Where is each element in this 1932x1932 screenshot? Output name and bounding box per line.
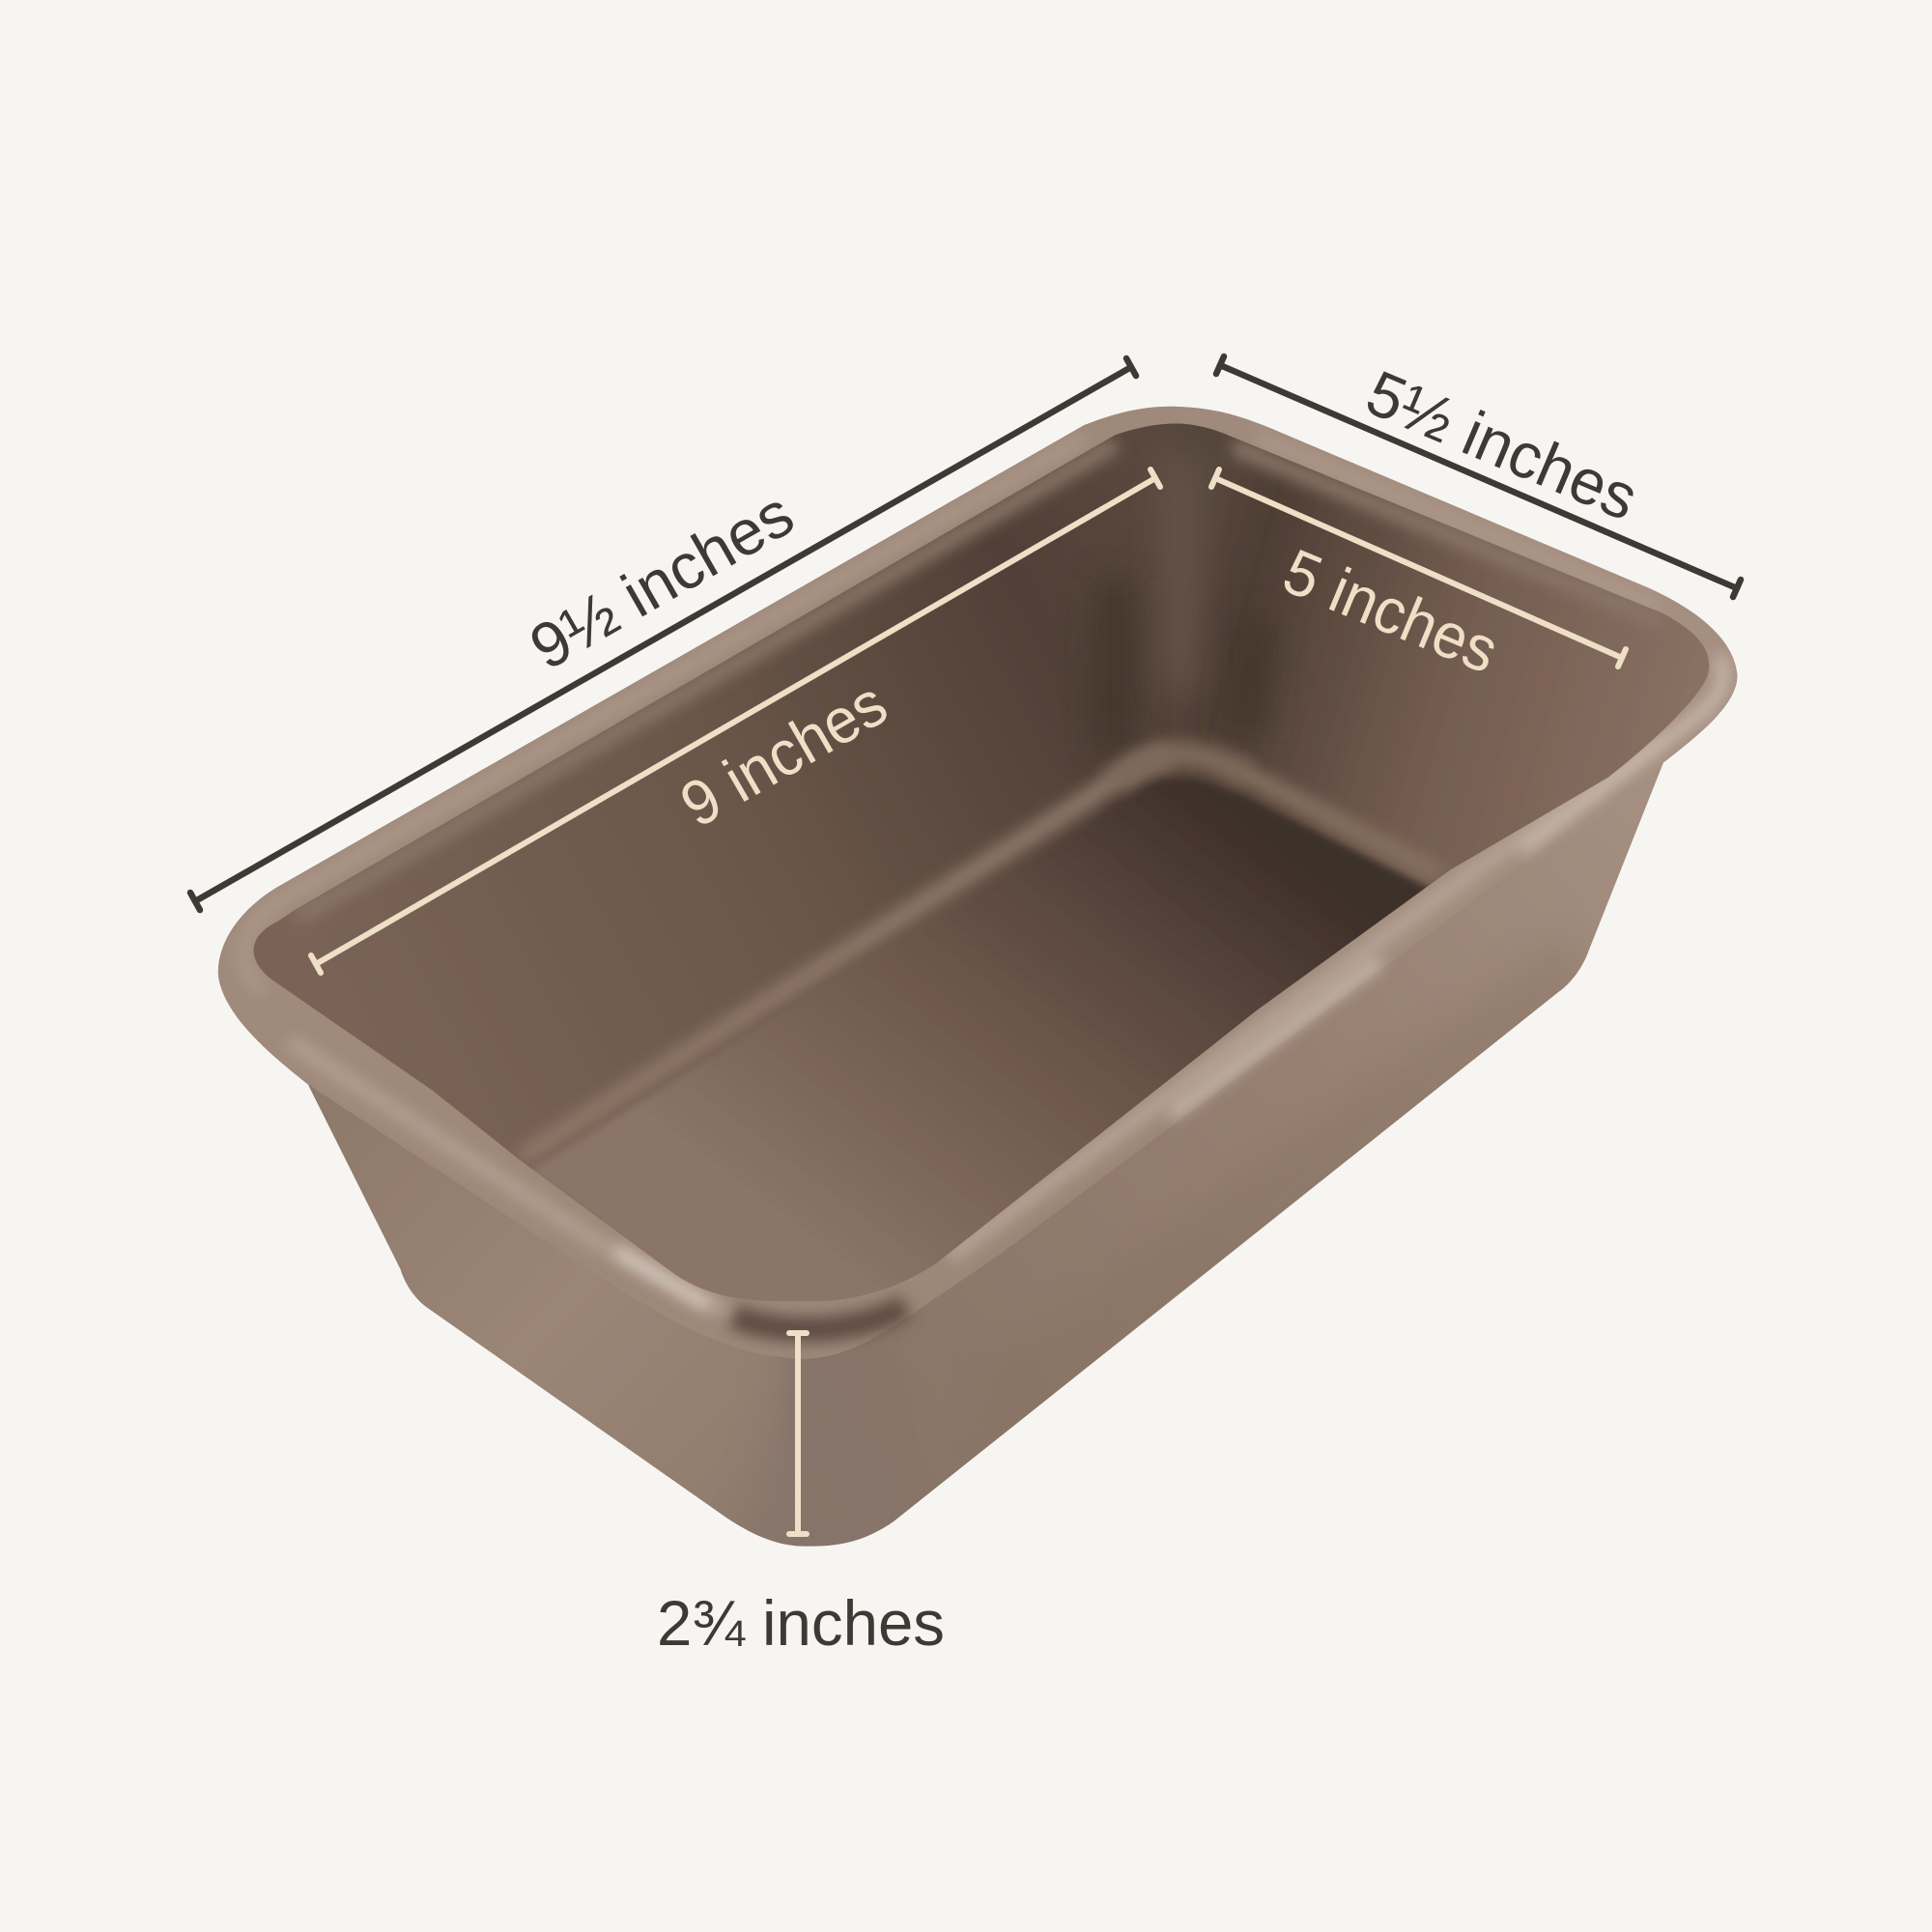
label: 5½ inches (1357, 356, 1648, 534)
label: 9 inches (668, 667, 898, 840)
dimension line (789, 1333, 807, 1534)
dimension line (311, 469, 1160, 973)
label: 5 inches (1274, 535, 1508, 687)
corner soft highlight (1169, 456, 1192, 690)
rim highlights (949, 737, 1658, 1257)
dark shade in corner (1100, 579, 1129, 752)
loaf pan illustration (218, 406, 1737, 1547)
fillet short side (1238, 770, 1441, 875)
dimension line (1216, 356, 1741, 597)
label: 2¾ inches (657, 1587, 945, 1659)
fillet corner (1115, 754, 1244, 782)
interior short wall (1180, 423, 1710, 910)
dimension: outer width 5 1/2 inches (1216, 356, 1741, 597)
dimension: inner length 9 inches (311, 469, 1160, 973)
dimension: outer length 9 1/2 inches (190, 358, 1136, 910)
pan rim (218, 407, 1737, 1359)
rim shadow at front corner (733, 1306, 905, 1329)
interior long wall (234, 407, 1220, 1343)
dimension line (1211, 469, 1626, 667)
pan interior (234, 407, 1725, 1343)
label: 9½ inches (518, 477, 805, 683)
inner rim lip shading (296, 443, 1115, 918)
interior floor (533, 777, 1431, 1301)
dimension: inner width 5 inches (1211, 469, 1626, 687)
fillet long side (520, 756, 1169, 1158)
dimension line (190, 358, 1136, 910)
pan exterior body (218, 406, 1737, 1547)
